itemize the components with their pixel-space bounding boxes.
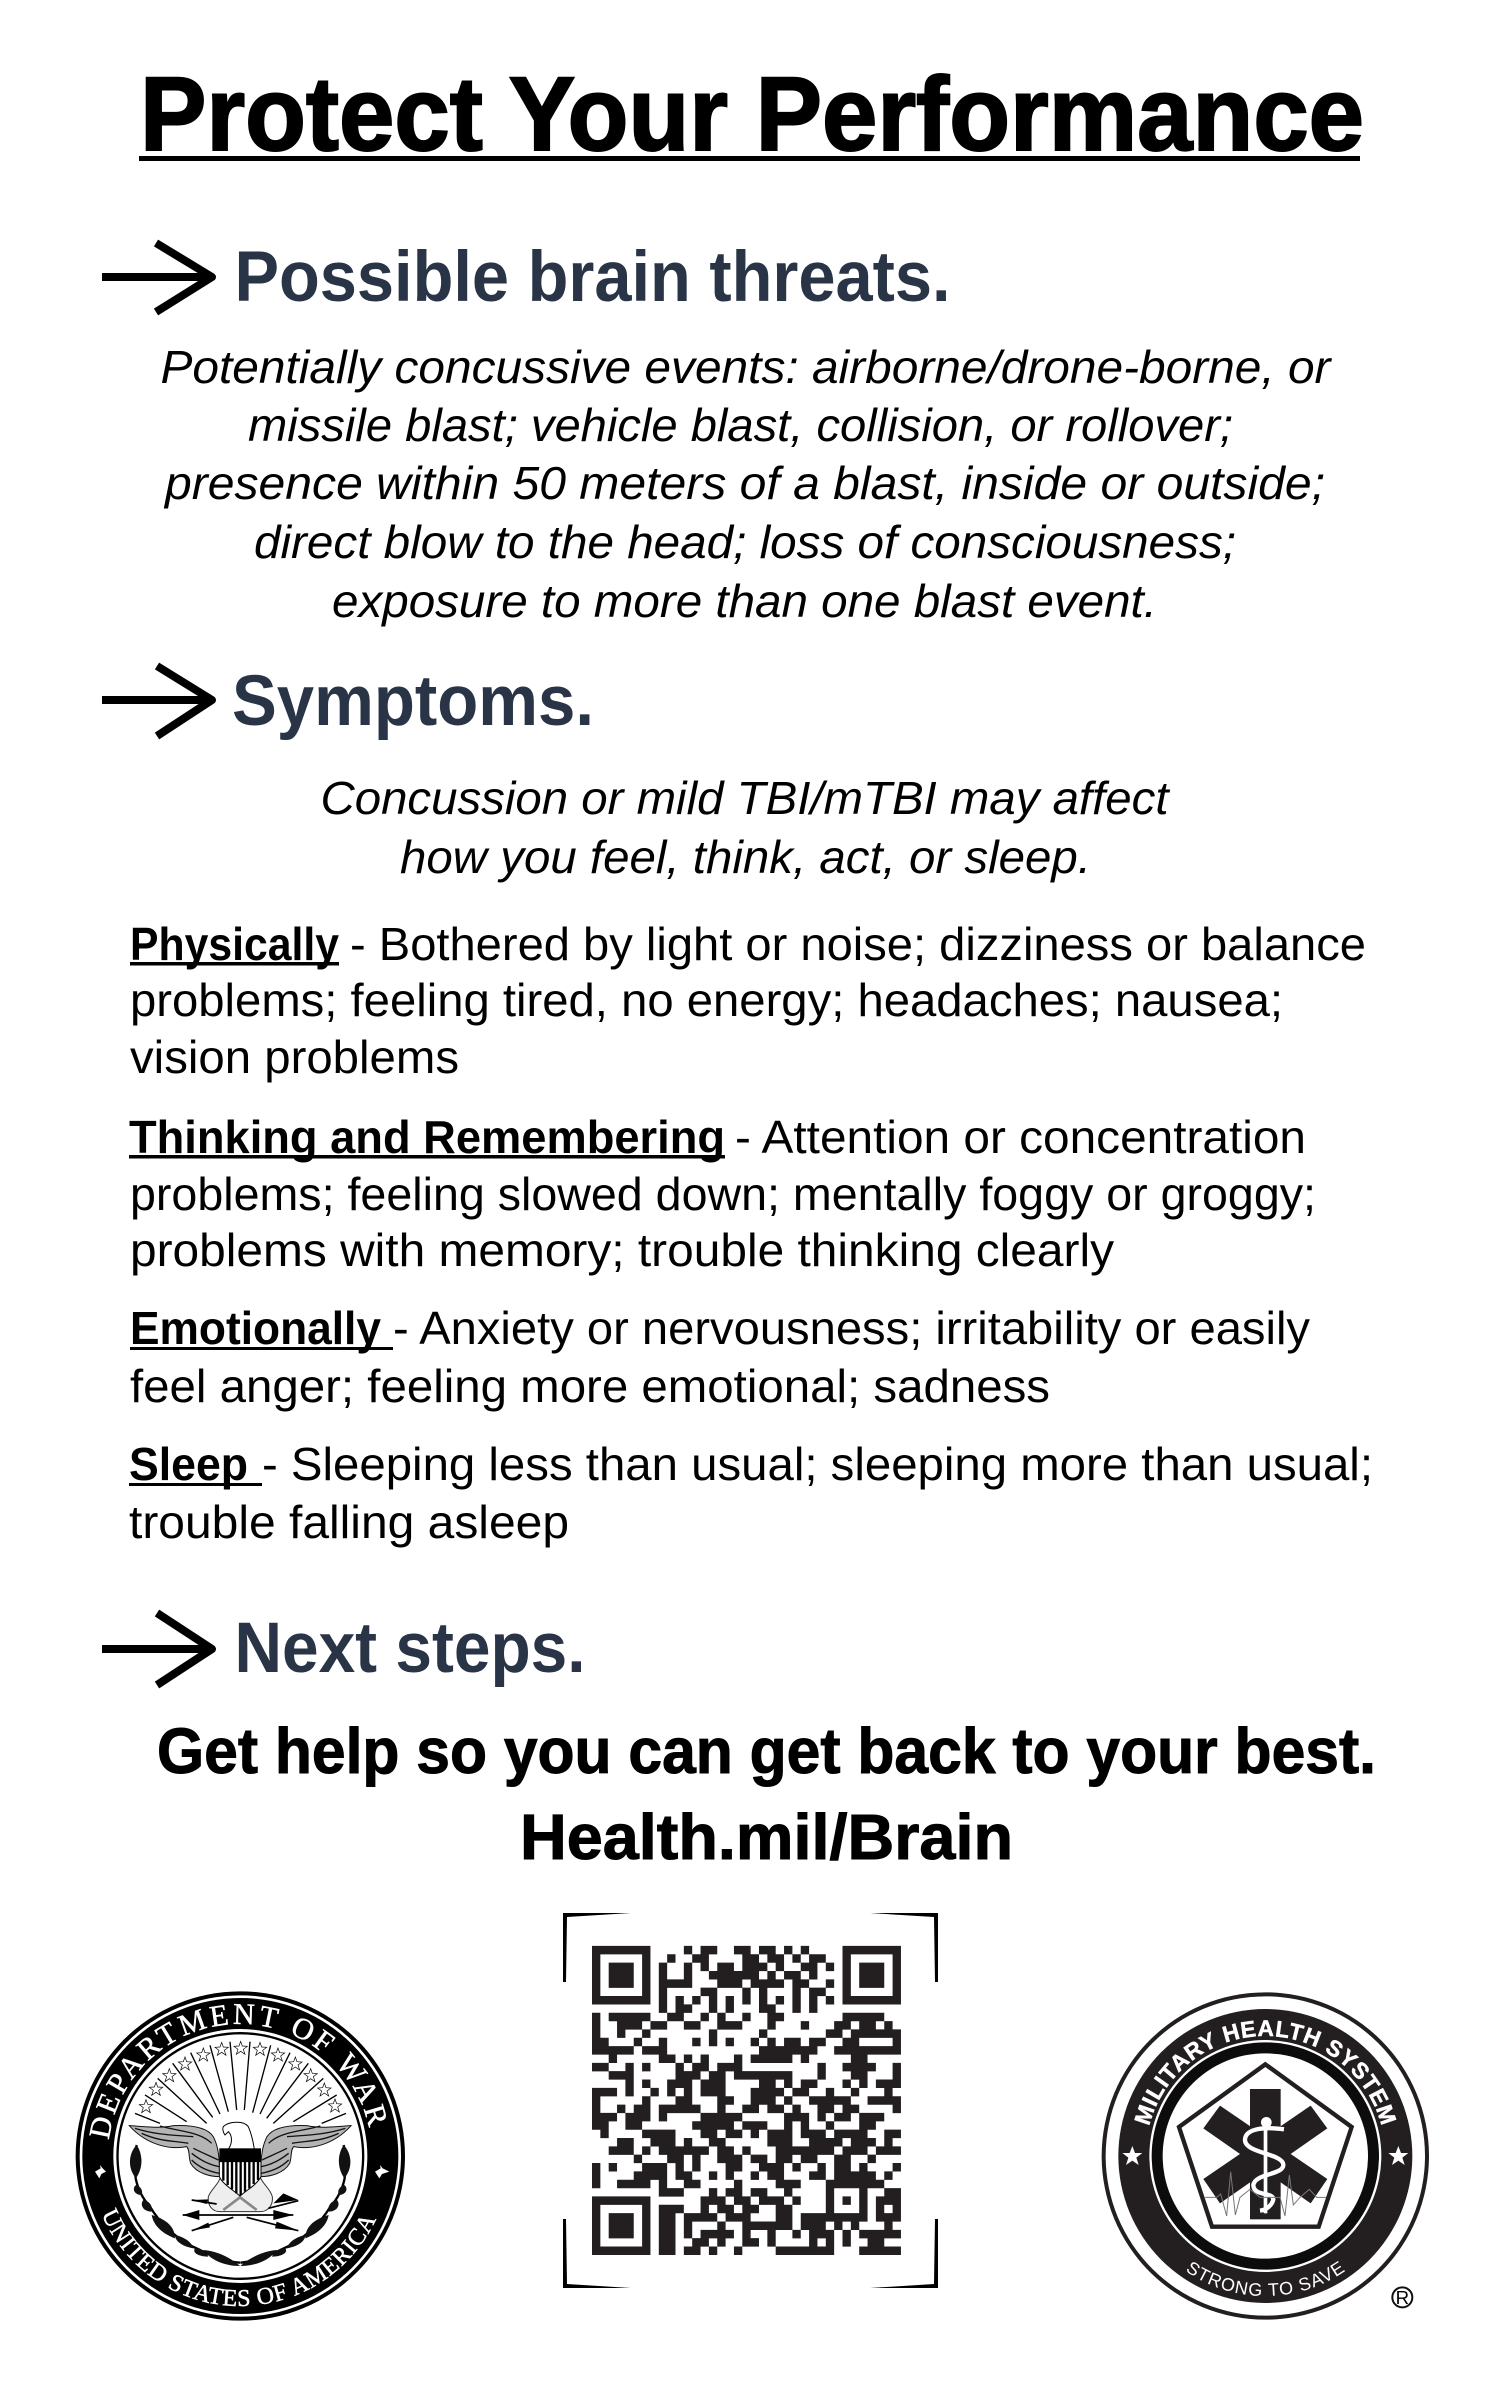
callout: website: Health.mil/Brain (520, 1801, 1013, 1873)
logo text: military health system: MILITARY HEALTH SYSTEM (1134, 2020, 1396, 2126)
text block: sleep (129, 1438, 1373, 1548)
logo rings (1102, 1992, 1429, 2320)
heading: next steps: Next steps. (234, 1609, 586, 1688)
text block: emotionally: feel anger; feeling more emotional; sadness (130, 1360, 1050, 1412)
qr code (563, 1913, 938, 2288)
star of life (1203, 2089, 1327, 2219)
text block: symptoms intro (320, 772, 1171, 883)
text block: thinking and remembering: problems; feeling slowed down; mentally foggy or groggy; (130, 1168, 1316, 1220)
text block: symptoms intro: how you feel, think, act, or sleep. (400, 831, 1091, 883)
heading: symptoms: Symptoms. (232, 662, 594, 741)
stars (139, 2041, 342, 2113)
text block: potentially concussive events: exposure to more than one blast event. (332, 575, 1157, 627)
eagle (129, 2122, 351, 2212)
pentagon (1179, 2064, 1352, 2227)
text block: physically: problems; feeling tired, no energy; headaches; nausea; (130, 974, 1283, 1026)
heading: possible brain threats: Possible brain threats. (234, 238, 950, 317)
icon: arrow (102, 243, 212, 312)
staff and serpent (1245, 2117, 1284, 2213)
icon: arrow (102, 666, 212, 736)
heartbeat line (1205, 2172, 1326, 2216)
registered mark: R (1396, 2287, 1409, 2308)
icon: department of war seal (76, 1991, 405, 2321)
text block: potentially concussive events (160, 341, 1332, 627)
text block: emotionally: - Anxiety or nervousness; irritability or easily (393, 1302, 1310, 1354)
text block: sleep: trouble falling asleep (129, 1496, 569, 1548)
qr modules (592, 1950, 901, 2251)
text block: emotionally: Emotionally (130, 1302, 381, 1354)
text block: potentially concussive events: presence within 50 meters of a blast, inside or outside; (163, 457, 1325, 509)
text block: physically: vision problems (130, 1031, 459, 1083)
icon: arrow (102, 1613, 212, 1685)
logo stars (1122, 2146, 1408, 2165)
seal ornaments (95, 2165, 389, 2178)
panel: symptoms (102, 662, 1373, 1548)
text block: potentially concussive events: direct blow to the head; loss of consciousness; (254, 516, 1236, 568)
text block: sleep: Sleep (129, 1438, 248, 1490)
panel: next steps (102, 1609, 1376, 1873)
icon: military health system logo (1102, 1992, 1429, 2320)
panel: possible brain threats (102, 238, 1332, 627)
corner brackets (563, 1913, 938, 2288)
text block: potentially concussive events: missile blast; vehicle blast, collision, or rollover; (248, 399, 1233, 451)
wreath (130, 2145, 350, 2266)
callout: get help: Get help so you can get back to your best. (157, 1715, 1376, 1787)
text block: thinking and remembering: Thinking and Remembering (129, 1111, 725, 1163)
eagle rays (135, 2042, 346, 2123)
text block: symptoms intro: Concussion or mild TBI/mTBI may affect (320, 772, 1171, 824)
seal rings (76, 1991, 405, 2321)
text block: sleep: - Sleeping less than usual; sleeping more than usual; (262, 1438, 1373, 1490)
logo text: strong to save: STRONG TO SAVE (1187, 2261, 1345, 2296)
title: Protect Your Performance (140, 56, 1364, 173)
registered mark (1392, 2287, 1412, 2308)
text block: thinking and remembering (129, 1111, 1316, 1276)
text block: thinking and remembering: - Attention or concentration (735, 1111, 1306, 1163)
text block: physically: Physically (130, 918, 339, 970)
text block: potentially concussive events: Potentially concussive events: airborne/drone-borne, or (160, 341, 1332, 393)
text block: physically: - Bothered by light or noise; dizziness or balance (350, 918, 1366, 970)
text block: physically (130, 918, 1366, 1083)
seal text: united states of america: UNITED STATES OF AMERICA (104, 2207, 376, 2306)
text block: thinking and remembering: problems with memory; trouble thinking clearly (130, 1224, 1114, 1276)
arrows (183, 2193, 298, 2231)
seal text: department of war: DEPARTMENT OF WAR (89, 2004, 386, 2140)
text block: emotionally (130, 1302, 1310, 1412)
